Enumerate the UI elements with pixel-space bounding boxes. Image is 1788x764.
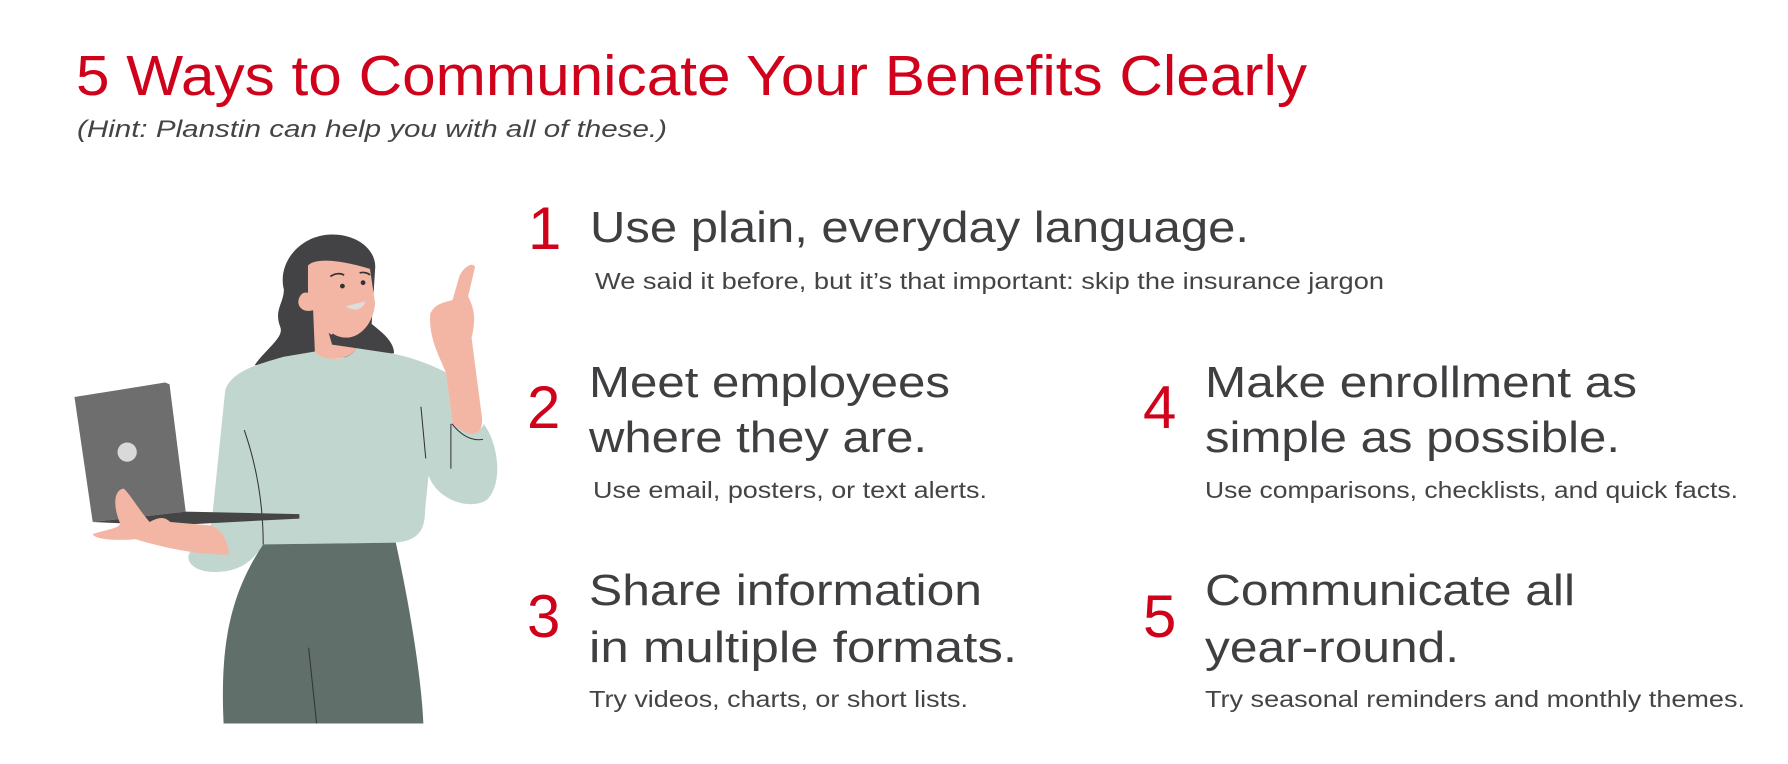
- description 4: Use comparisons, checklists, and quick facts.: [1205, 477, 1738, 503]
- description 1: We said it before, but it’s that important: skip the insurance jargon: [595, 268, 1384, 294]
- item 4: [1143, 358, 1738, 503]
- description 5: Try seasonal reminders and monthly themes.: [1205, 686, 1745, 712]
- subtitle: (Hint: Planstin can help you with all of these.): [77, 116, 667, 143]
- heading 3: Share information: [589, 566, 982, 615]
- number 5: 5: [1143, 583, 1176, 650]
- description 2: Use email, posters, or text alerts.: [593, 477, 987, 503]
- illustration: woman with laptop: [74, 234, 497, 723]
- number 2: 2: [527, 374, 560, 441]
- number 1: 1: [528, 195, 561, 262]
- item 1: [528, 195, 1384, 294]
- laptop: [74, 383, 186, 522]
- item 5: year-round.: [1205, 623, 1459, 672]
- pants: [223, 543, 423, 723]
- heading 4: Make enrollment as: [1205, 358, 1637, 407]
- item 2: where they are.: [588, 413, 927, 462]
- item 4: simple as possible.: [1205, 413, 1620, 462]
- hand: [93, 489, 229, 555]
- number 4: 4: [1143, 374, 1176, 441]
- title: 5 Ways to Communicate Your Benefits Clearly: [76, 44, 1308, 108]
- description 3: Try videos, charts, or short lists.: [589, 686, 968, 712]
- raised arm: [430, 265, 482, 434]
- heading 5: Communicate all: [1205, 566, 1575, 615]
- item 2: [527, 358, 987, 503]
- hair: [255, 234, 394, 365]
- face: [298, 261, 375, 359]
- item 5: [1143, 566, 1745, 712]
- heading 2: Meet employees: [589, 358, 950, 407]
- shirt: [188, 348, 497, 572]
- number 3: 3: [527, 583, 560, 650]
- item 3: [527, 566, 1017, 712]
- item 3: in multiple formats.: [589, 623, 1017, 672]
- heading 1: Use plain, everyday language.: [590, 203, 1249, 252]
